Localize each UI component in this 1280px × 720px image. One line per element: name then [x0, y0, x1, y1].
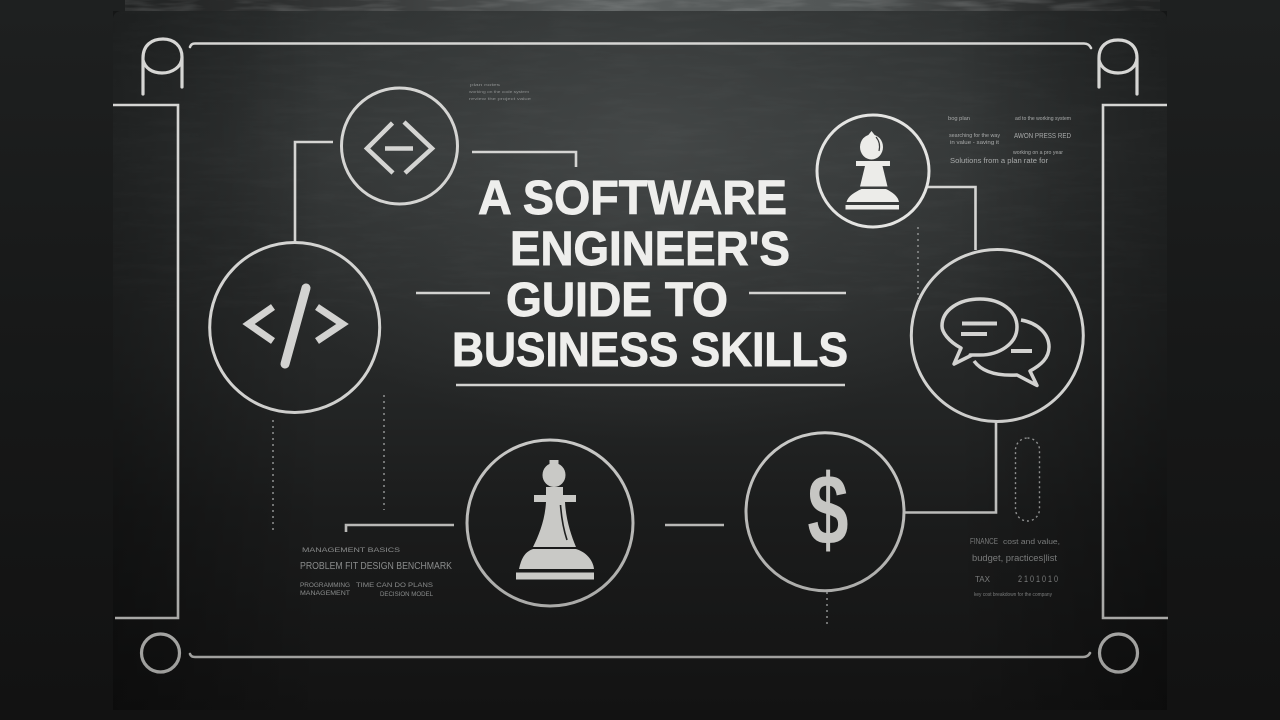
icon: large code circle	[210, 242, 380, 412]
top-right corner ornament	[1099, 40, 1137, 94]
small note: bottom right: FINANCE	[970, 537, 998, 546]
title rule left	[416, 292, 490, 294]
small note: bottom left: TIME CAN DO PLANS	[356, 582, 434, 589]
small note: top centre	[469, 82, 532, 101]
small note: bottom right: TAX	[975, 575, 991, 584]
dotted capsule	[1016, 438, 1040, 521]
bottom-right ring	[1100, 634, 1138, 672]
small note: top right: AWON PRESS RED	[1014, 131, 1071, 140]
small note: bottom left: MANAGEMENT	[300, 590, 350, 597]
small note: bottom left: DECISION MODEL	[380, 592, 434, 598]
right bracket	[1103, 105, 1168, 618]
slate texture	[113, 11, 1167, 311]
small note: bottom right: cost and value,	[1003, 539, 1060, 546]
connectors	[295, 142, 996, 532]
icon: king circle	[467, 440, 633, 606]
small note: bottom right	[970, 537, 1060, 598]
title rule right	[749, 292, 846, 294]
title: GUIDE TO	[506, 274, 728, 327]
slate light glow	[113, 11, 1167, 511]
title	[452, 172, 848, 377]
icon: bishop circle	[817, 115, 929, 227]
connector: small code to large code	[295, 142, 333, 243]
small note: bottom left: MANAGEMENT BASICS	[302, 548, 400, 554]
frame: top and bottom rails, corners, side brackets	[113, 39, 1168, 672]
connector: king to left	[346, 525, 454, 532]
small note: top right: searching for the way	[949, 133, 1000, 139]
small note: bottom left	[300, 548, 452, 598]
icon: dollar circle: $	[807, 453, 849, 566]
bottom-left ring	[142, 634, 180, 672]
small note: bottom right: 2 1 0 1 0 1 0	[1018, 574, 1058, 584]
small note: top right	[948, 116, 1071, 165]
small note: bottom left: PROGRAMMING	[300, 582, 350, 589]
title: BUSINESS SKILLS	[452, 324, 848, 377]
small note: bottom left: PROBLEM FIT DESIGN BENCHMARK	[300, 561, 452, 572]
small note: top right: in value - saving it	[950, 140, 1000, 146]
small note: top right: ad to the working system	[1015, 116, 1071, 122]
connector: strategy to communication	[926, 187, 976, 250]
title: A SOFTWARE	[478, 172, 787, 225]
icon: speech bubbles circle	[911, 250, 1083, 422]
small note: bottom right: budget, practices|list	[972, 553, 1058, 563]
small note: top right: bog plan	[948, 116, 970, 122]
small note: top centre: review the project value	[469, 96, 532, 101]
small note: top centre: plan notes	[470, 82, 500, 87]
slate panel	[113, 11, 1167, 710]
icon: dollar circle	[746, 433, 904, 591]
connector: king to finance	[665, 524, 724, 526]
top rail	[190, 44, 1091, 48]
small note: bottom right: key cost breakdown for the company	[974, 592, 1052, 598]
connector: small code to title	[472, 152, 576, 167]
slate top edge texture	[125, 0, 1160, 14]
title: ENGINEER'S	[510, 223, 790, 276]
top-left corner ornament	[143, 39, 182, 94]
left bracket	[113, 105, 178, 618]
bottom rail	[190, 653, 1090, 657]
connector: communication to finance	[904, 421, 996, 512]
small note: top right: working on a pro year	[1013, 150, 1063, 156]
icon: small code circle	[342, 88, 458, 204]
small note: top right: Solutions from a plan rate for	[950, 158, 1049, 165]
small note: top centre: working on the code system	[469, 89, 530, 94]
title underline	[456, 384, 845, 386]
dotted vertical marks	[273, 227, 918, 625]
slate side shading	[113, 11, 1167, 710]
slate top rough edge	[125, 0, 1160, 14]
